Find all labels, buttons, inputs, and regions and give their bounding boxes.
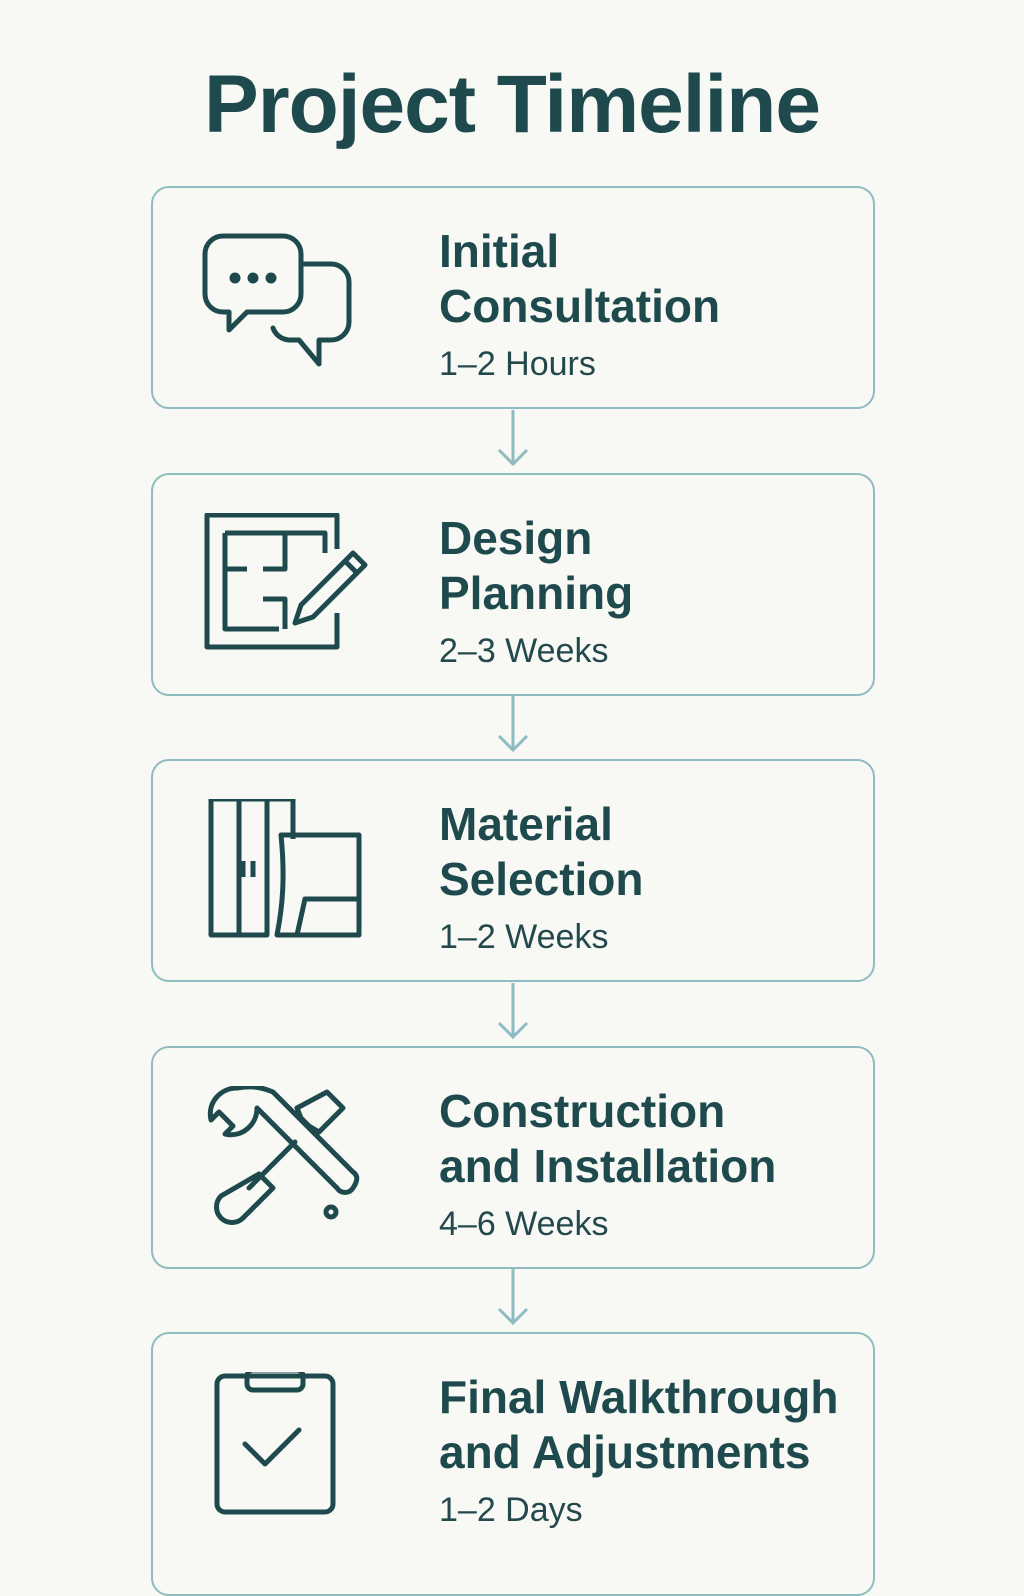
arrow 1 bbox=[498, 410, 528, 466]
text: construction: Construction bbox=[439, 1085, 725, 1137]
icon: clipboard check bbox=[214, 1372, 336, 1514]
text: initial consultation: 1–2 Hours bbox=[439, 345, 596, 383]
panel: final walkthrough bbox=[151, 1332, 875, 1596]
text: construction bbox=[439, 1085, 776, 1243]
arrow 2 bbox=[498, 696, 528, 752]
panel: material selection bbox=[151, 759, 875, 982]
text: material selection: 1–2 Weeks bbox=[439, 918, 608, 956]
text: material selection: Selection bbox=[439, 853, 644, 905]
text: design planning bbox=[439, 512, 633, 670]
icon: floor plan with pencil bbox=[204, 513, 368, 650]
text: initial consultation: Consultation bbox=[439, 280, 720, 332]
text: final walkthrough bbox=[439, 1371, 838, 1529]
text: design planning: Design bbox=[439, 512, 592, 564]
text: final walkthrough: Final Walkthrough bbox=[439, 1371, 838, 1423]
arrow 4 bbox=[498, 1269, 528, 1325]
text: construction: and Installation bbox=[439, 1140, 776, 1192]
text: design planning: 2–3 Weeks bbox=[439, 632, 608, 670]
text: initial consultation bbox=[439, 225, 720, 383]
text: construction: 4–6 Weeks bbox=[439, 1205, 608, 1243]
panel: initial consultation bbox=[151, 186, 875, 409]
text: material selection: Material bbox=[439, 798, 613, 850]
text: final walkthrough: 1–2 Days bbox=[439, 1491, 583, 1529]
icon: chat bubbles bbox=[202, 234, 352, 366]
text: material selection bbox=[439, 798, 644, 956]
text: initial consultation: Initial bbox=[439, 225, 559, 277]
icon: wrench and screwdriver bbox=[208, 1086, 360, 1225]
icon: cabinet and samples bbox=[208, 799, 362, 938]
title: Project Timeline bbox=[204, 59, 820, 150]
panel: construction bbox=[151, 1046, 875, 1269]
text: final walkthrough: and Adjustments bbox=[439, 1426, 810, 1478]
text: design planning: Planning bbox=[439, 567, 633, 619]
panel: design planning bbox=[151, 473, 875, 696]
arrow 3 bbox=[498, 983, 528, 1039]
